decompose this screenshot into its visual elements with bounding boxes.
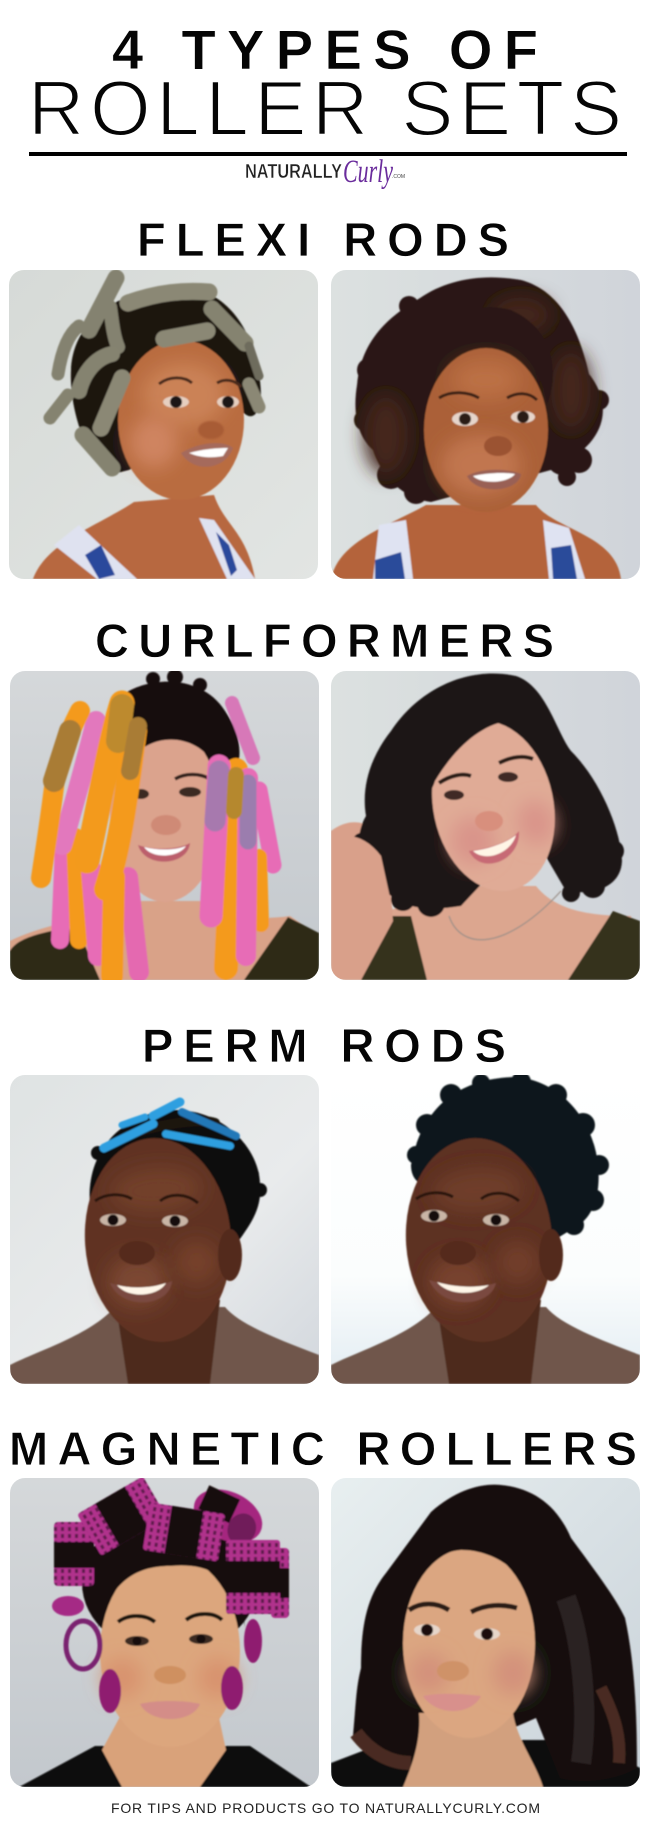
photo: flexi rods before [9, 270, 318, 579]
logo: NaturallyCurly: .COM [392, 174, 405, 180]
heading: magnetic rollers: MAGNETIC ROLLERS [9, 1422, 637, 1475]
heading: flexi rods: FLEXI RODS [137, 213, 509, 266]
logo: NaturallyCurly [245, 154, 405, 190]
photo: magnetic rollers after [331, 1478, 640, 1787]
photo: flexi rods after [331, 270, 640, 579]
photo: perm rods after [331, 1072, 640, 1384]
logo: NaturallyCurly: NATURALLY [245, 161, 343, 183]
photo: curlformers before [10, 669, 319, 980]
heading: perm rods: PERM RODS [142, 1019, 506, 1072]
heading: curlformers: CURLFORMERS [95, 614, 554, 667]
title [28, 18, 622, 152]
photo: curlformers after [331, 671, 640, 980]
photo: magnetic rollers before [10, 1476, 319, 1787]
title rule [29, 152, 627, 156]
footer note: FOR TIPS AND PRODUCTS GO TO NATURALLYCURLY.COM [111, 1800, 540, 1816]
title: 4 TYPES OF [112, 18, 538, 81]
logo: NaturallyCurly: Curly [343, 154, 393, 190]
title: ROLLER SETS [28, 64, 622, 152]
photo: perm rods before [10, 1075, 319, 1384]
